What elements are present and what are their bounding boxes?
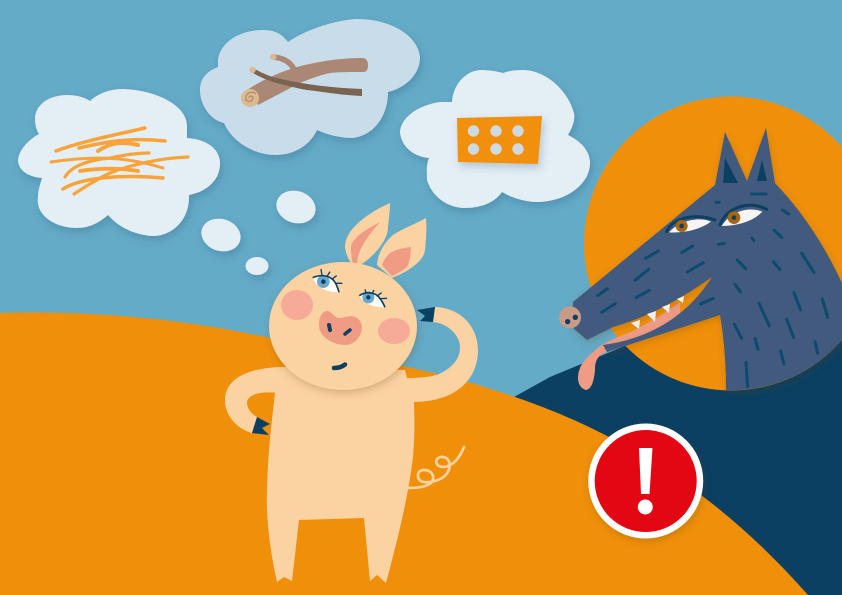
wolf mouth [613, 277, 712, 345]
thin stick [253, 68, 362, 96]
pig left hoof [252, 417, 270, 435]
cloud shape [200, 19, 420, 155]
thought cloud: sticks [200, 19, 420, 155]
wolf eyes [667, 205, 767, 232]
wolf [559, 128, 842, 390]
brick [457, 116, 542, 164]
brick holes [468, 125, 524, 155]
pig left arm [225, 367, 282, 433]
pig nostrils and mouth [329, 325, 350, 368]
thought cloud: brick [400, 70, 590, 208]
pig ears [345, 203, 426, 278]
wolf ear inners [723, 158, 767, 183]
pig right arm [407, 307, 478, 402]
wolf teeth [631, 296, 684, 329]
badge red disc [595, 430, 697, 532]
pig tail [409, 447, 464, 488]
pig [225, 203, 478, 583]
cloud shape [400, 70, 590, 208]
pig head [269, 262, 417, 390]
pig right hoof [417, 307, 435, 322]
pig eyes [313, 269, 387, 307]
straw strands [51, 128, 188, 194]
badge ring [588, 424, 703, 538]
sticks [241, 54, 368, 107]
thick log [247, 58, 368, 105]
thought bubbles [197, 186, 320, 275]
pig cheeks [281, 290, 313, 320]
exclamation mark [638, 448, 653, 514]
orange sun [584, 96, 842, 390]
orange foreground hill [0, 312, 808, 595]
wolf head and neck [572, 128, 842, 390]
pig body [267, 367, 414, 583]
navy hill [505, 300, 842, 595]
warning badge [588, 424, 703, 538]
log end with rings [241, 89, 259, 107]
cloud shape [18, 89, 220, 236]
wolf tongue [578, 302, 680, 390]
thought cloud: straw [18, 89, 220, 236]
wolf fur marks [598, 194, 828, 387]
branch stub [273, 57, 295, 72]
pig snout [319, 311, 362, 345]
wolf nose [559, 306, 581, 328]
